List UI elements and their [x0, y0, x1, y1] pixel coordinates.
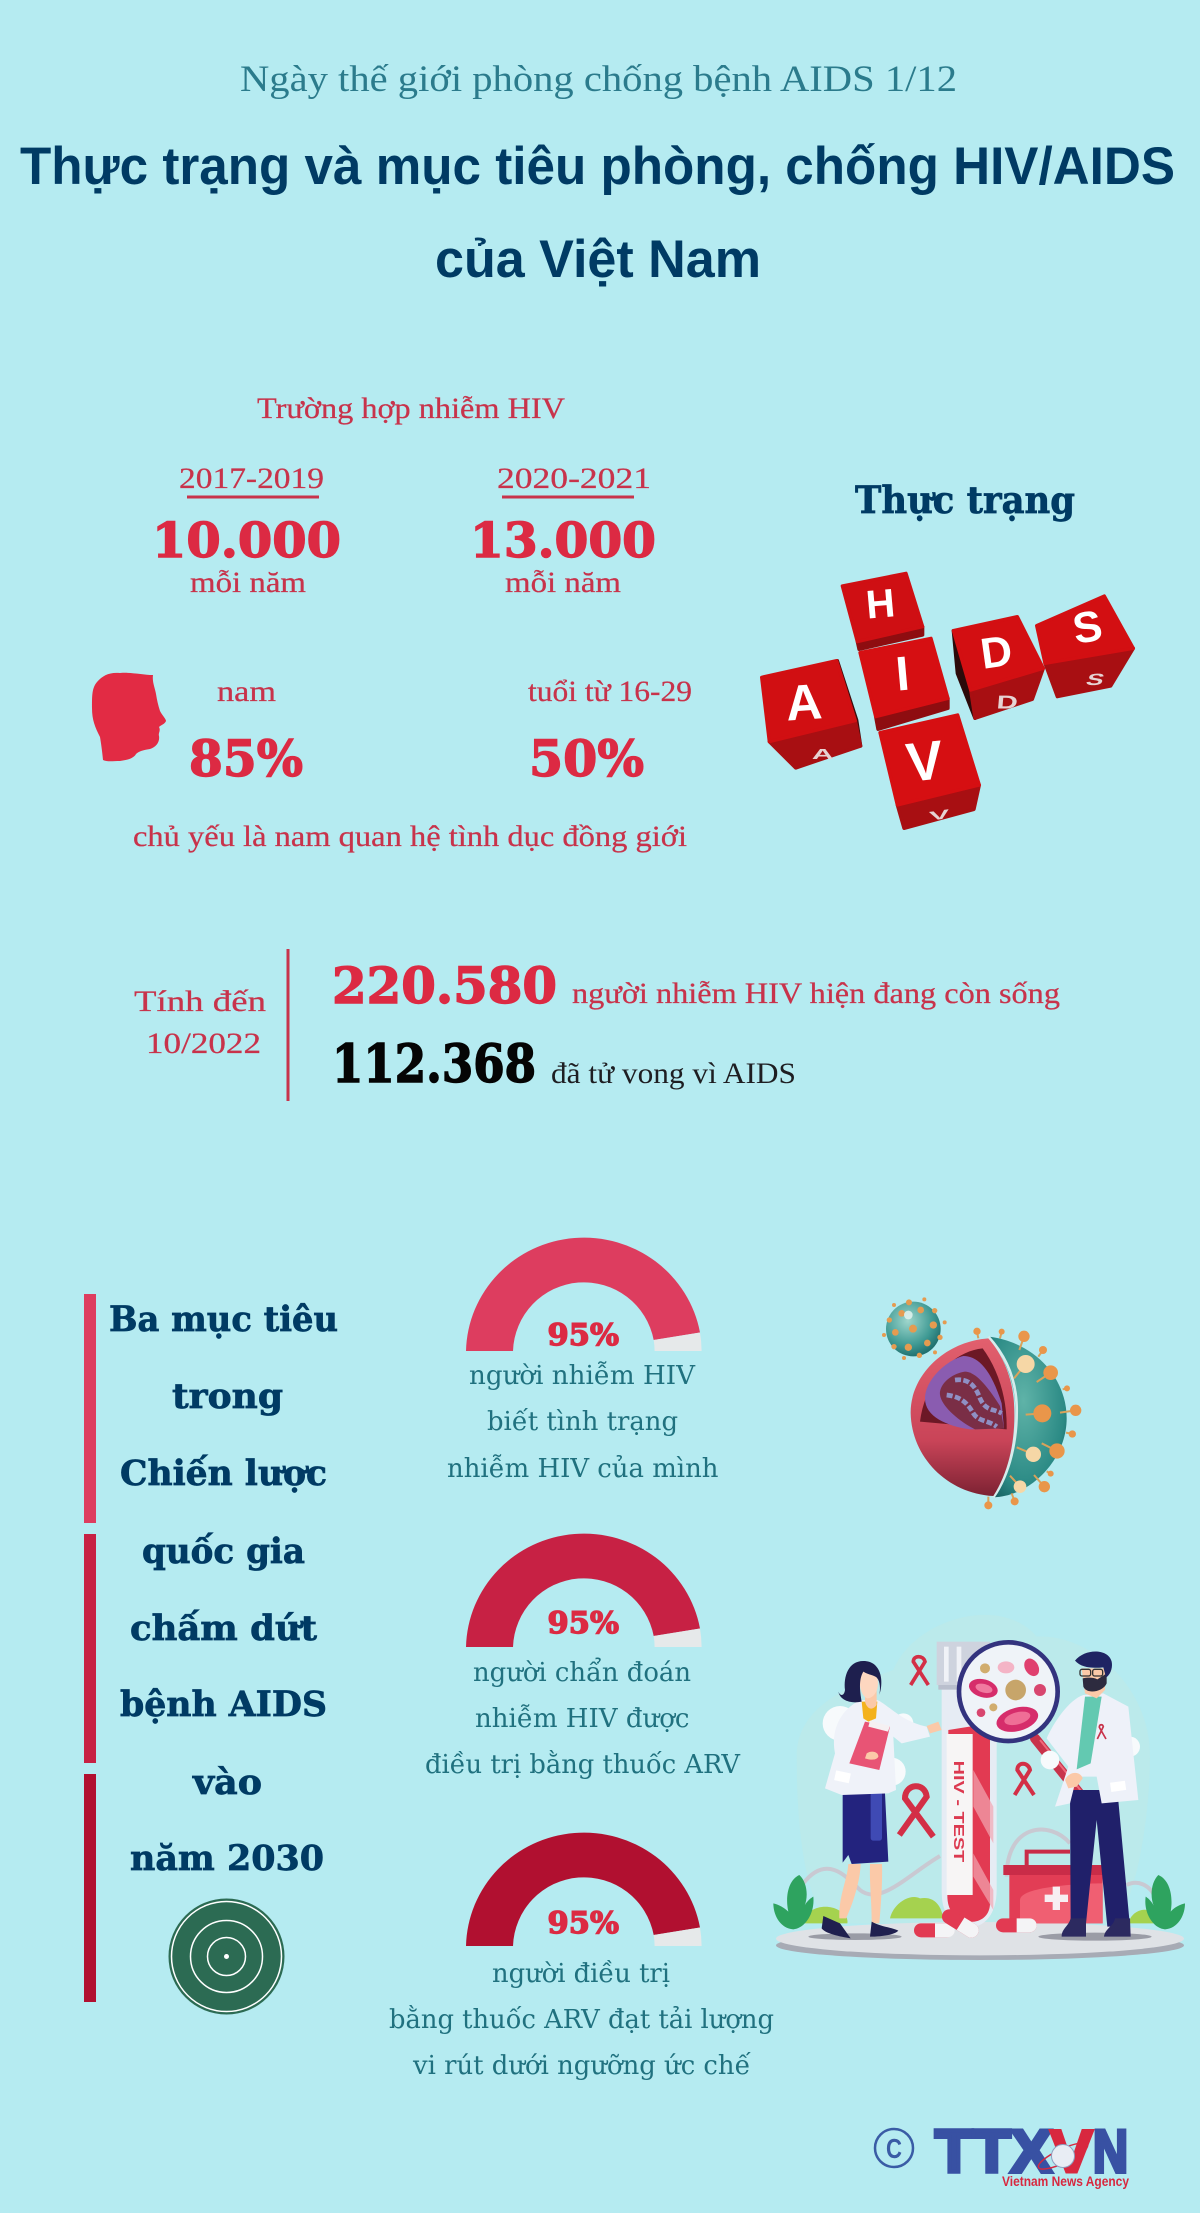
vertical divider	[286, 949, 290, 1101]
color bar 3	[84, 1774, 96, 2002]
date label: 10/2022	[146, 1027, 261, 1060]
medical box	[1003, 1852, 1105, 1923]
TTXVN wordmark: V	[1050, 2118, 1093, 2185]
subtitle: Ngày thế giới phòng chống bệnh AIDS 1/12	[240, 59, 957, 100]
goal 1 text: nhiễm HIV của mình	[447, 1454, 719, 1484]
gauge 95%: 95%	[548, 1318, 619, 1353]
panel: goal 2	[425, 1534, 741, 1780]
goals heading text	[109, 1299, 338, 1879]
header	[20, 59, 1175, 289]
goals heading text: năm 2030	[130, 1838, 324, 1879]
gauge 95%: 95%	[548, 1606, 619, 1641]
die D: D	[978, 627, 1015, 679]
title line 1: Thực trạng và mục tiêu phòng, chống HIV/AIDS	[20, 137, 1175, 196]
goal 2 text: người chẩn đoán	[473, 1657, 691, 1688]
panel: HIV cases	[92, 392, 692, 853]
die H: H	[864, 581, 897, 628]
die A: A	[812, 746, 834, 763]
goal 1 text	[447, 1361, 719, 1484]
goal 2 text	[425, 1657, 741, 1780]
icon: target	[168, 1898, 284, 2014]
small virus	[882, 1297, 947, 1360]
die S: S	[1083, 670, 1107, 689]
goal 2 text: nhiễm HIV được	[475, 1704, 690, 1734]
goals heading text: Ba mục tiêu	[109, 1299, 338, 1340]
test tube: HIV - TEST	[950, 1761, 966, 1862]
color bar 2	[84, 1534, 96, 1763]
heading: current status: Thực trạng	[855, 478, 1075, 522]
stat: AIDS deaths: đã tử vong vì AIDS	[551, 1057, 796, 1090]
panel: three goals title	[84, 1294, 338, 2014]
agency name: Vietnam News Agency	[1002, 2174, 1129, 2189]
goals heading text: chấm dứt	[130, 1608, 317, 1649]
die D: D	[996, 692, 1019, 713]
die V	[880, 715, 979, 828]
icon: doctors examining HIV test	[773, 1615, 1185, 1960]
stat: living with HIV: người nhiễm HIV hiện đang còn sống	[572, 977, 1060, 1010]
stat: male 85%: 85%	[189, 729, 303, 788]
stat: 2017-2019	[152, 462, 341, 599]
large virus red shell cutaway	[911, 1338, 1014, 1496]
die V: V	[928, 806, 951, 823]
die S	[1037, 596, 1133, 697]
panel: goal 1	[447, 1238, 719, 1484]
stat: AIDS deaths: 112.368	[332, 1034, 536, 1095]
stat: 2020-2021: 2020-2021	[497, 462, 651, 495]
stat: 2020-2021	[470, 462, 656, 599]
stat: living with HIV	[332, 956, 1060, 1015]
color bar 1	[84, 1294, 96, 1523]
large virus spikes and teal shell	[973, 1328, 1081, 1509]
goals heading text: trong	[172, 1376, 283, 1417]
stat: AIDS deaths	[332, 1034, 796, 1095]
soft background blob	[797, 1615, 1150, 1923]
magnifying glass	[959, 1642, 1093, 1811]
date label	[134, 985, 266, 1060]
die H	[842, 573, 923, 649]
pills	[914, 1907, 1037, 1941]
panel: totals to 10/2022	[134, 949, 1060, 1101]
goal 3 text: vi rút dưới ngưỡng ức chế	[412, 2051, 751, 2081]
goals heading text: Chiến lược	[120, 1453, 327, 1494]
copyright symbol: C	[886, 2133, 902, 2164]
goal 3 text	[389, 1959, 774, 2081]
goals heading text: bệnh AIDS	[120, 1684, 327, 1725]
goal 1 text: biết tình trạng	[487, 1407, 678, 1437]
note: transmission group: chủ yếu là nam quan hệ tình dục đồng giới	[133, 820, 687, 853]
gauge 95%	[466, 1833, 702, 1946]
stat: age 16-29 50%	[528, 675, 692, 788]
TTXVN wordmark: N	[1093, 2118, 1128, 2185]
footer logo	[875, 2118, 1129, 2189]
date label: Tính đến	[134, 985, 266, 1018]
goal 3 text: người điều trị	[492, 1959, 670, 1989]
die A	[762, 661, 861, 768]
stat: 2017-2019: 10.000	[152, 513, 341, 569]
gauge 95%	[466, 1534, 702, 1647]
TTXVN wordmark: TTX	[935, 2118, 1052, 2185]
gauge 95%	[466, 1238, 702, 1353]
stat: age 16-29 50%: 50%	[529, 729, 644, 788]
stat: male 85%: nam	[217, 675, 276, 708]
stat: 2017-2019: 2017-2019	[179, 462, 324, 495]
heading: cases: Trường hợp nhiễm HIV	[257, 392, 565, 425]
stat: 2017-2019: mỗi năm	[190, 566, 306, 599]
man doctor	[1041, 1652, 1140, 1937]
die I	[860, 638, 948, 729]
stat: male 85%	[189, 675, 303, 788]
platform	[776, 1922, 1184, 1960]
icon: HIV AIDS dice	[762, 573, 1133, 828]
icon: male head	[92, 673, 166, 761]
goal 1 text: người nhiễm HIV	[469, 1361, 696, 1391]
woman doctor	[822, 1661, 942, 1938]
stat: living with HIV: 220.580	[332, 956, 557, 1015]
icon: virus illustration	[882, 1297, 1081, 1509]
goals heading text: vào	[192, 1762, 262, 1803]
stat: 2020-2021: 13.000	[470, 513, 656, 569]
goal 2 text: điều trị bằng thuốc ARV	[425, 1749, 741, 1780]
gauge 95%: 95%	[548, 1906, 619, 1941]
goals heading text: quốc gia	[142, 1531, 305, 1572]
goal 3 text: bằng thuốc ARV đạt tải lượng	[389, 2004, 774, 2035]
stat: 2020-2021: mỗi năm	[505, 566, 621, 599]
cords	[803, 1830, 1157, 1900]
ribbons	[899, 1657, 1034, 1837]
test tube	[937, 1642, 997, 1927]
panel: goal 3	[389, 1833, 774, 2081]
die S: S	[1069, 602, 1106, 654]
die I: I	[894, 647, 912, 702]
plants	[773, 1875, 1185, 1929]
die V: V	[903, 728, 946, 794]
TTXVN wordmark	[935, 2118, 1128, 2185]
die D	[953, 617, 1043, 718]
die A: A	[784, 673, 824, 732]
copyright symbol	[875, 2129, 913, 2167]
stat: age 16-29 50%: tuổi từ 16-29	[528, 675, 692, 708]
title line 2: của Việt Nam	[435, 230, 761, 289]
